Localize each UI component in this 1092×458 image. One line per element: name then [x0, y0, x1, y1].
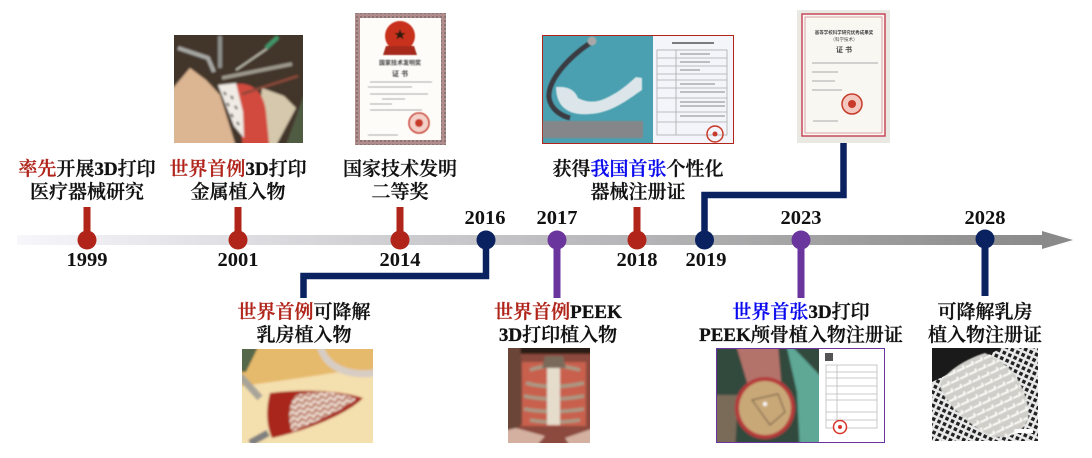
year 2018: 2018: [616, 249, 658, 271]
caption 2001: 世界首例3D打印: [169, 159, 307, 180]
year 2019: 2019: [686, 249, 726, 271]
stem and dot 2023: [792, 230, 810, 298]
certificate: ministry science award: 证 书: [836, 45, 852, 54]
timeline axis arrow: [17, 231, 1073, 249]
certificate: national invention award: [355, 13, 446, 145]
year 2016: 2016: [464, 207, 506, 229]
milestone 2016: [232, 207, 506, 453]
milestone 2001: [170, 35, 306, 266]
certificate: ministry science award: [797, 10, 890, 143]
caption 2014: 二等奖: [371, 181, 429, 203]
caption 2018: 获得我国首张个性化: [552, 159, 724, 180]
milestone 2018: [542, 35, 734, 271]
photo: PEEK rib cage implant: [508, 348, 590, 443]
year 1999: 1999: [66, 249, 108, 271]
caption 2014: 国家技术发明: [343, 158, 457, 180]
photo: degradable breast implant surgery: [242, 349, 373, 443]
milestone 2017: [494, 207, 622, 453]
year 2028: 2028: [964, 207, 1006, 229]
photo and document: PEEK skull implant registration: [716, 348, 885, 443]
stem and dot 2001: [228, 207, 248, 250]
milestone 2028: [928, 207, 1042, 441]
caption 2017: 3D打印植入物: [499, 324, 617, 346]
caption 2016: 世界首例可降解: [237, 302, 371, 323]
photo: metal implant surgery: [174, 35, 303, 143]
year 2001: 2001: [218, 249, 258, 271]
caption 2016: 乳房植入物: [256, 324, 352, 346]
year 2014: 2014: [380, 249, 420, 271]
stem and dot 2014: [390, 207, 410, 250]
caption 2018: 器械注册证: [590, 181, 686, 203]
photo and document: personalized jaw device registration: [542, 35, 734, 144]
caption 2028: 植入物注册证: [928, 324, 1042, 346]
milestone 2023: [699, 207, 903, 452]
stem and dot 2018: [628, 207, 646, 250]
stem and dot 2028: [976, 230, 994, 296]
caption 1999: 医疗器械研究: [30, 181, 144, 203]
year 2023: 2023: [780, 207, 822, 229]
connector and dot 2016: [304, 230, 496, 298]
stem and dot 2017: [548, 230, 566, 298]
certificate: ministry science award: （科学技术）: [830, 36, 858, 43]
caption 1999: 率先开展3D打印: [18, 159, 156, 180]
certificate: ministry science award: 高等学校科学研究优秀成果奖: [815, 29, 874, 36]
milestone 1999: [18, 158, 156, 271]
milestone 2014: [343, 13, 457, 271]
stem and dot 1999: [78, 207, 96, 250]
caption 2028: 可降解乳房: [937, 301, 1033, 323]
caption 2001: 金属植入物: [190, 181, 286, 203]
certificate: national invention award: 国家技术发明奖: [379, 59, 421, 67]
caption 2023: PEEK颅骨植入物注册证: [699, 324, 903, 346]
photo: 3D printed breast implant scaffold: [932, 348, 1038, 441]
certificate: national invention award: 证 书: [392, 69, 408, 78]
caption 2023: 世界首张3D打印: [732, 302, 870, 323]
milestone 2019: [686, 10, 890, 271]
caption 2017: 世界首例PEEK: [494, 302, 622, 323]
connector and dot 2019: [695, 143, 844, 250]
year 2017: 2017: [536, 207, 578, 229]
